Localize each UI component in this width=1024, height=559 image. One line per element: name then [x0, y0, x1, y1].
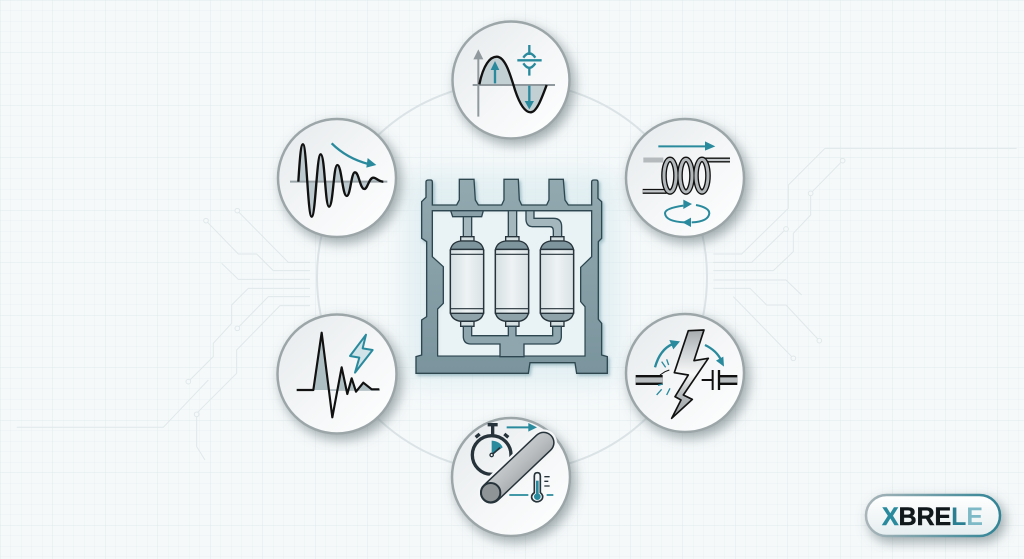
central glow	[405, 172, 619, 384]
vacuum interrupter 3	[540, 237, 574, 326]
panel: coil with current arrow and rotation	[626, 119, 744, 237]
device interior panel	[433, 211, 591, 355]
central device: three-pole vacuum interrupter assembly	[416, 179, 607, 373]
upper pipes	[463, 211, 562, 237]
circuit traces: left	[17, 208, 310, 460]
panel: damped oscillation with decay arrow	[278, 119, 396, 237]
connecting ring	[317, 82, 707, 472]
logo: XBRELE	[866, 495, 1000, 536]
device frame	[416, 179, 607, 373]
panel: stopwatch, heated rod and thermometer	[452, 418, 570, 536]
panel: lightning arc across contact gap	[626, 314, 744, 432]
vacuum interrupter 1	[450, 237, 484, 326]
panel: transient spike with lightning	[278, 314, 396, 434]
vacuum interrupter 2	[495, 237, 529, 326]
top bus connector	[432, 211, 592, 217]
circuit traces: right	[713, 148, 1017, 361]
panel: sine wave with capacitor symbol	[452, 22, 570, 138]
lower pipes	[463, 326, 561, 357]
logo: XBRELE: XBRELE	[882, 503, 983, 531]
